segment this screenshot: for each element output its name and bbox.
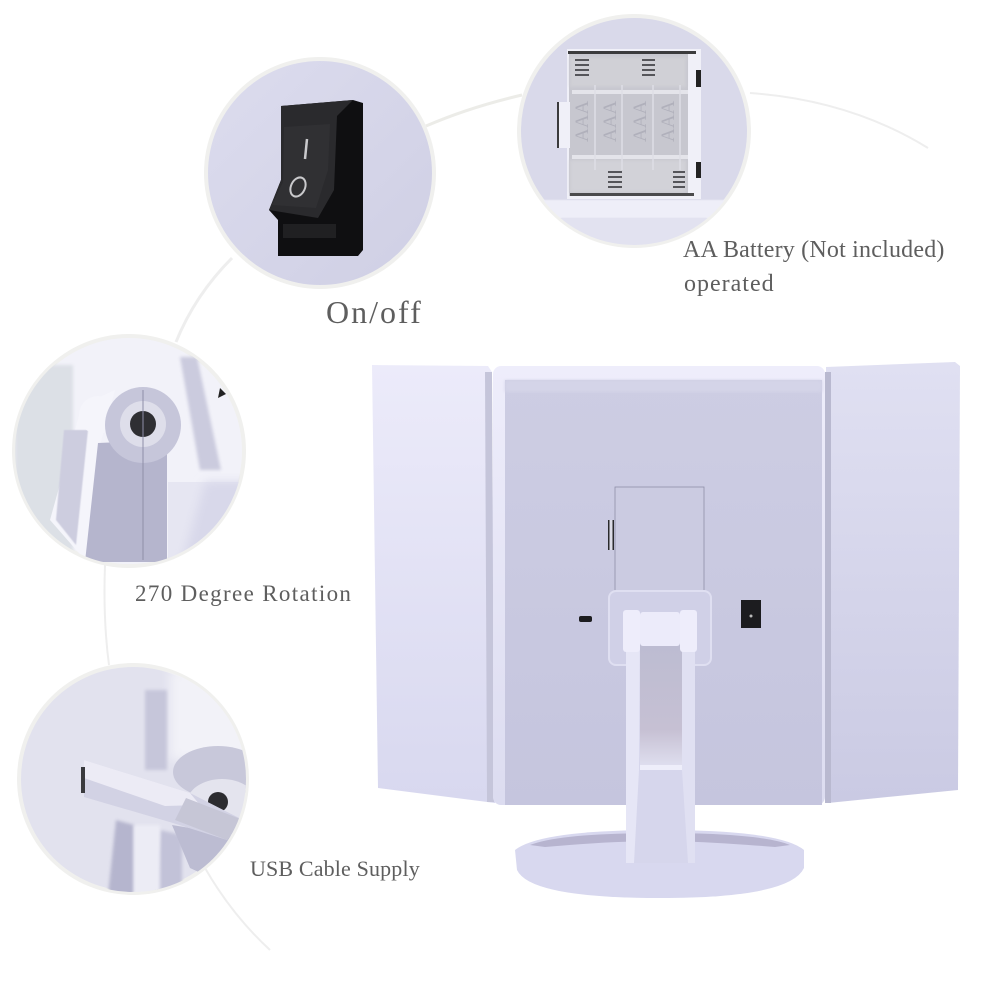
label: On/off: On/off bbox=[326, 294, 423, 330]
icon: battery bay: AAA bbox=[600, 101, 621, 142]
callout circle: on/off switch bbox=[204, 57, 436, 289]
stand hinge bbox=[623, 610, 697, 652]
label: AA battery bbox=[683, 237, 945, 297]
stand bracket bbox=[609, 591, 711, 665]
round base bbox=[515, 830, 804, 898]
left seam bbox=[485, 372, 494, 802]
stand arm bbox=[626, 620, 695, 863]
icon: battery bay: AAA bbox=[658, 101, 679, 142]
right panel bbox=[826, 362, 960, 803]
battery cover bbox=[615, 487, 704, 591]
icon: battery bay: AAA bbox=[572, 101, 593, 142]
label: USB Cable Supply: USB Cable Supply bbox=[250, 856, 420, 881]
left panel bbox=[372, 365, 495, 803]
icon: battery bay bbox=[567, 49, 701, 199]
power switch bbox=[741, 600, 761, 628]
label: AA battery: AA Battery (Not included) bbox=[683, 237, 945, 263]
label: 270 Degree Rotation: 270 Degree Rotation bbox=[135, 581, 352, 606]
callout circle: battery compartment bbox=[517, 14, 751, 250]
icon: rocker switch bbox=[269, 100, 363, 256]
callout circle: USB cable bbox=[17, 663, 263, 895]
connecting arc lines bbox=[104, 93, 928, 950]
icon: USB plug bbox=[81, 760, 243, 840]
right seam bbox=[825, 372, 831, 803]
cover latch bbox=[608, 520, 614, 550]
icon: battery bay: AAA bbox=[630, 101, 651, 142]
label: AA battery: operated bbox=[684, 271, 775, 297]
callout circle: hinge rotation bbox=[12, 334, 250, 572]
center panel bbox=[493, 366, 825, 805]
tri-fold mirror back bbox=[372, 362, 960, 898]
micro USB port bbox=[579, 616, 592, 622]
